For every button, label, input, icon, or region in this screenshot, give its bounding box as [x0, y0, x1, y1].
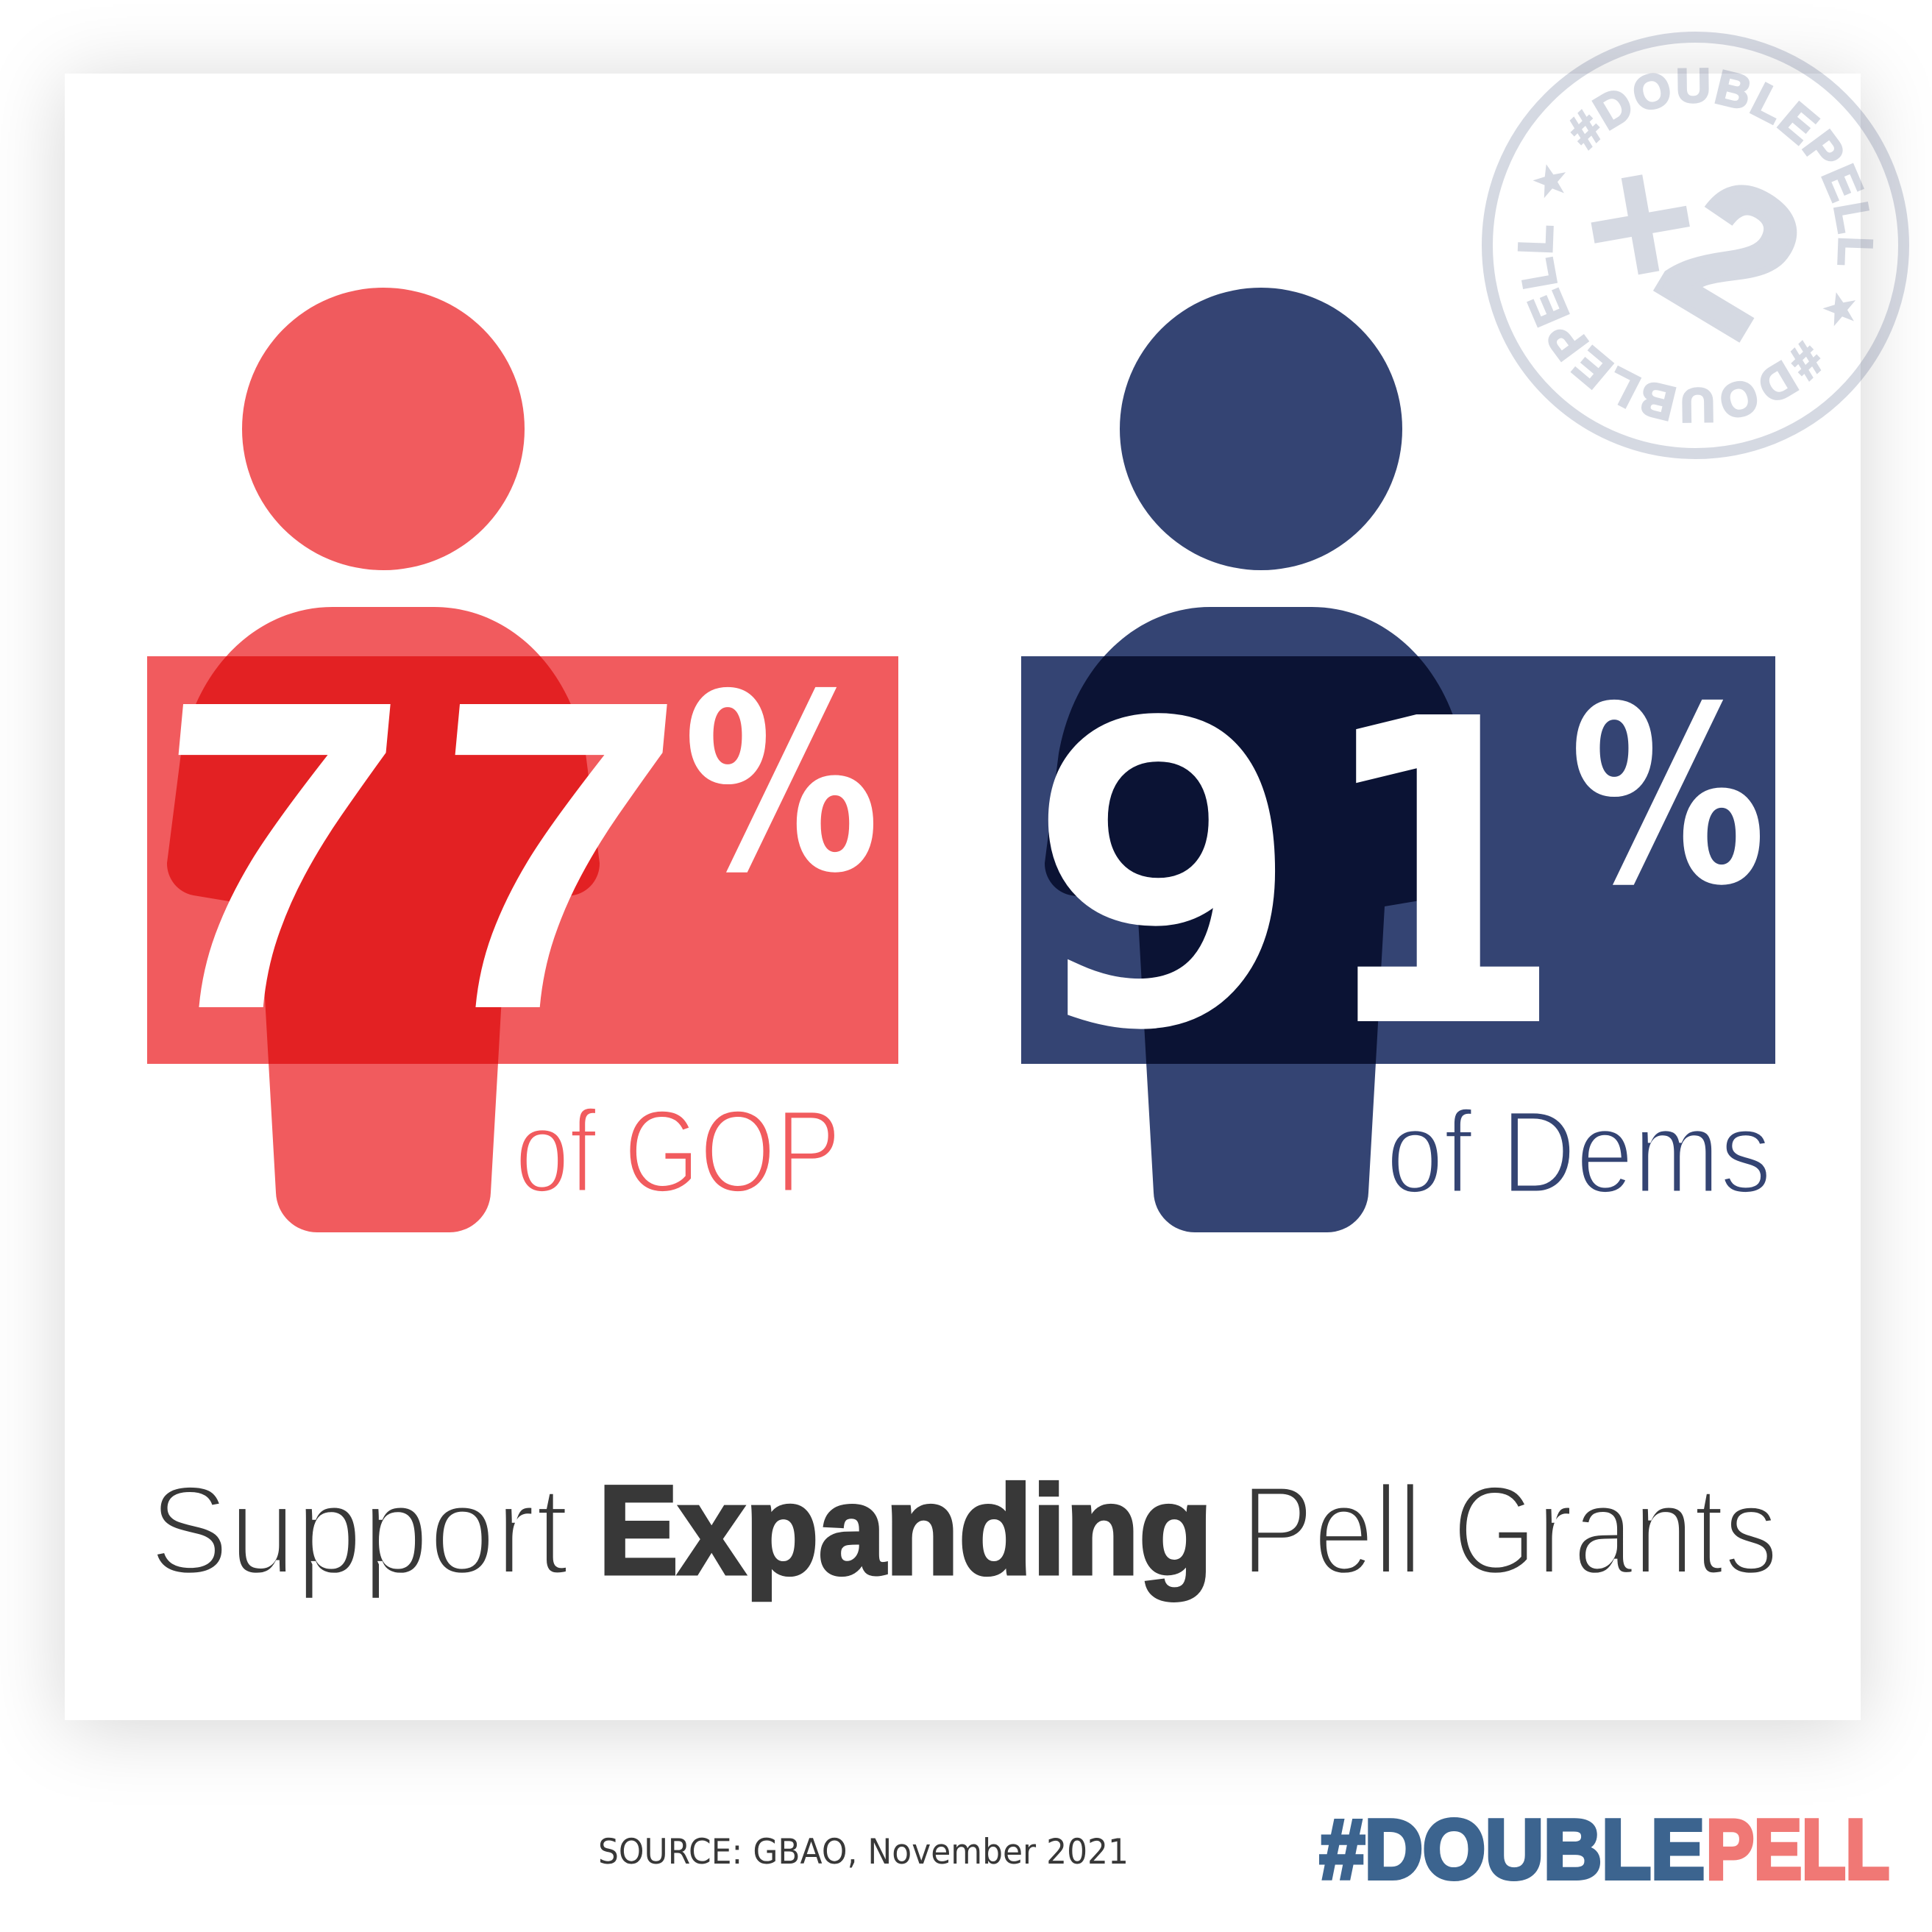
stamp top arc text: #DOUBLEPELL [1570, 68, 1873, 265]
big number: 91 percent [1031, 631, 1766, 1121]
big number: 91 percent: 1 [1316, 631, 1563, 1121]
icon: navy person body [1045, 607, 1477, 1232]
stamp bottom arc text: #DOUBLEPELL [1517, 225, 1822, 423]
icon: right star [1819, 288, 1861, 327]
big number: 77 percent: 7 [405, 609, 695, 1100]
source note: SOURCE: GBAO, November 2021 [598, 1832, 1129, 1872]
icon: navy person head [1120, 288, 1402, 570]
label: of Dems: of Dems [1386, 1086, 1772, 1218]
icon: red person head [242, 288, 525, 570]
hashtag logo: #DOUBLEPELL: PELL [1706, 1803, 1889, 1897]
plus sign: + [1566, 106, 1714, 338]
heading: Support Expanding Pell Grants: Support [149, 1460, 569, 1601]
big number: 91 percent: % [1570, 655, 1766, 940]
hashtag logo: #DOUBLEPELL: #DOUBLE [1320, 1803, 1705, 1897]
stamp: #DOUBLEPELL +2 seal [1482, 32, 1909, 459]
heading: Support Expanding Pell Grants [149, 1460, 1778, 1601]
panel: white card with soft shadow [65, 74, 1861, 1720]
big number: 91 percent: 9 [1031, 649, 1295, 1108]
navy percentage banner [1021, 656, 1775, 1064]
label: of GOP: of GOP [515, 1085, 841, 1217]
icon: left star [1530, 160, 1571, 199]
heading: Support Expanding Pell Grants: Expanding [598, 1460, 1212, 1601]
panel: GOP statistic [129, 288, 898, 1232]
heading: Support Expanding Pell Grants: Pell Grants [1241, 1460, 1778, 1601]
numeral two: 2 [1630, 135, 1836, 378]
red percentage banner [147, 656, 898, 1064]
big number: 77 percent: 7 [129, 609, 418, 1100]
panel: Democrat statistic [1021, 288, 1775, 1232]
stamp outer ring [1488, 37, 1904, 453]
big number: 77 percent: % [683, 642, 879, 928]
big number: 77 percent [129, 609, 879, 1100]
icon: red person body [167, 607, 600, 1232]
